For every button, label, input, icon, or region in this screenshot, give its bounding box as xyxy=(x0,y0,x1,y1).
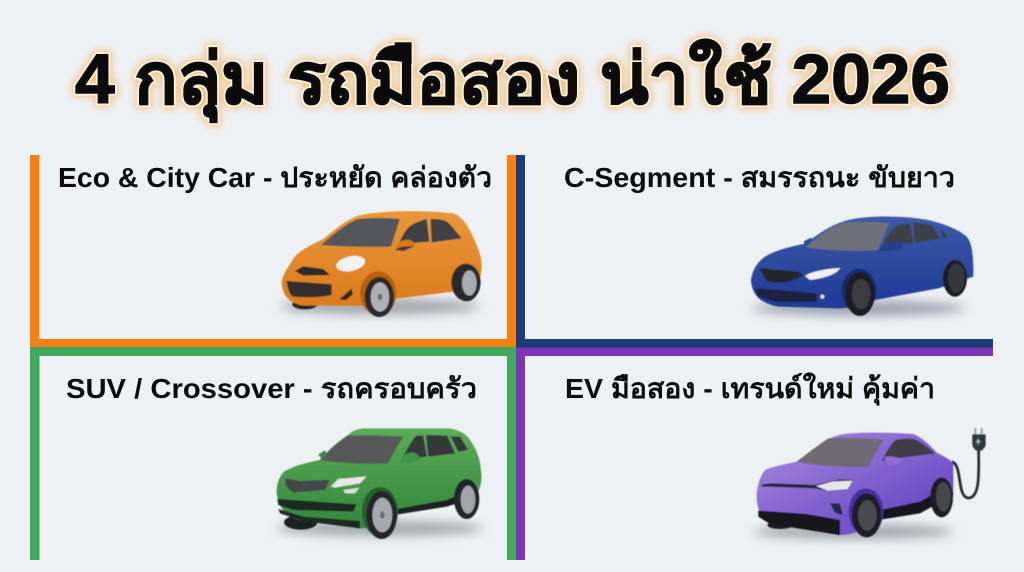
heading: C-Segment: C-Segment - สมรรถนะ ขับยาว xyxy=(564,162,955,193)
heading: SUV / Crossover: SUV / Crossover - รถครอบครัว xyxy=(66,373,477,404)
heading: EV: EV มือสอง - เทรนด์ใหม่ คุ้มค่า xyxy=(565,372,935,406)
title: 4 กลุ่ม รถมือสอง น่าใช้ 2026 xyxy=(75,38,950,123)
panel: SUV / Crossover xyxy=(30,347,516,560)
car: orange hatchback xyxy=(280,211,482,317)
icon: charging cable and plug xyxy=(952,428,986,498)
panel frame: green xyxy=(30,347,516,560)
panel frame: purple xyxy=(516,348,993,560)
panel: EV xyxy=(516,348,993,560)
car: purple electric SUV with charging plug xyxy=(753,428,986,539)
panel frame: blue xyxy=(516,155,993,348)
car: blue sedan xyxy=(751,216,973,316)
panel: C-Segment xyxy=(516,155,993,348)
title: 4 กลุ่ม รถมือสอง น่าใช้ 2026 xyxy=(75,38,950,123)
title: 4 กลุ่ม รถมือสอง น่าใช้ 2026 xyxy=(75,38,950,123)
panel: Eco & City Car xyxy=(30,155,516,347)
heading: Eco & City Car: Eco & City Car - ประหยัด คล่องตัว xyxy=(58,162,492,193)
car: green SUV xyxy=(277,428,483,539)
panel frame: orange xyxy=(30,155,516,347)
